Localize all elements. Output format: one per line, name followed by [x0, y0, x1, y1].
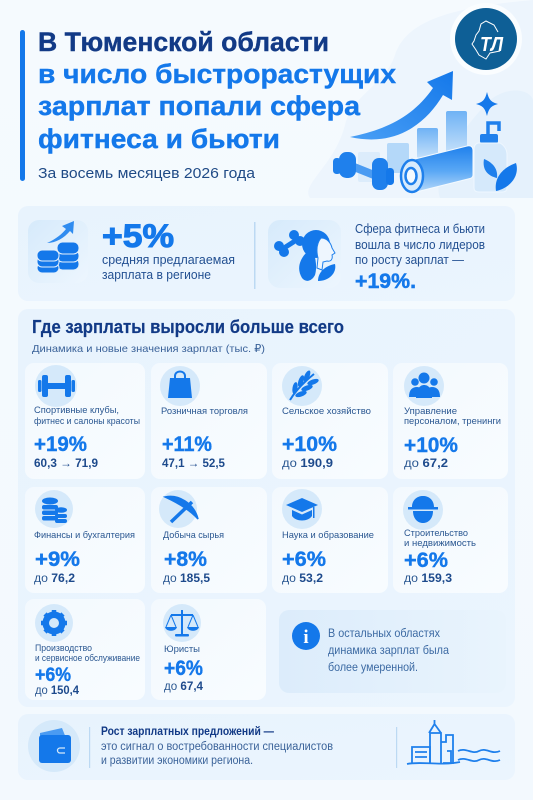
icon: info [292, 622, 320, 650]
icon: shopping bag [168, 372, 192, 398]
icon: bottle with leaves [474, 123, 517, 192]
card: science and education [272, 487, 388, 593]
card: retail: +11% [162, 433, 212, 456]
card: HR and training: Управление [404, 406, 457, 417]
subheading: Динамика и новые значения зарплат (тыс. ₽) [32, 343, 265, 355]
title: в число быстрорастущих [38, 59, 396, 89]
title accent bar [20, 30, 25, 181]
icon: fitness roller [401, 146, 473, 192]
card: construction: Строительство [404, 528, 468, 539]
stat: +5%: зарплата в регионе [102, 268, 211, 282]
card: retail [151, 363, 267, 479]
card: agriculture: до 190,9 [282, 456, 333, 470]
card: sports clubs: +19% [34, 433, 87, 456]
icon: wallet [28, 720, 80, 772]
logo region outline [472, 21, 500, 59]
icon: city by the river [407, 720, 500, 764]
card: lawyers: до 67,4 [164, 679, 203, 693]
card: construction: до 159,3 [404, 571, 452, 585]
card: mining: +8% [164, 548, 207, 571]
card: construction [393, 487, 508, 593]
fitness leaders text: Сфера фитнеса и бьюти [355, 222, 485, 236]
fitness leaders text: +19%. [355, 270, 416, 293]
card: finance: Финансы и бухгалтерия [34, 530, 135, 541]
callout: other sectors: более умеренной. [328, 660, 418, 674]
card: manufacturing and service [25, 599, 145, 700]
icon: info: i [303, 627, 309, 648]
heading: Где зарплаты выросли больше всего [32, 317, 344, 337]
icon: sparkle [476, 92, 498, 116]
card: HR and training: +10% [404, 434, 458, 457]
card: manufacturing and service: и сервисное обслуживание [35, 653, 140, 664]
callout: other sectors: В остальных областях [328, 626, 440, 640]
conclusion text [101, 726, 333, 767]
card: science and education: до 53,2 [282, 571, 323, 585]
card: sports clubs: 60,3 → 71,9 [34, 456, 98, 470]
header illustration [308, 0, 533, 198]
card: science and education: Наука и образование [282, 530, 374, 541]
icon: dumbbell [333, 152, 394, 190]
icon: hard hat [408, 496, 438, 523]
logo letters: ТЛ [480, 34, 504, 56]
title: фитнеса и бьюти [38, 124, 280, 154]
fitness leaders text: по росту зарплат — [355, 253, 464, 267]
card: finance: +9% [35, 548, 80, 571]
icon tile: coins with arrow [28, 220, 88, 283]
panel: salary growth by sector [18, 309, 515, 707]
card: mining: Добыча сырья [163, 530, 224, 541]
icon: people [409, 372, 440, 398]
card: construction: +6% [404, 549, 448, 572]
icon: pickaxe [165, 496, 198, 522]
growth arrow [350, 71, 453, 139]
card: retail: Розничная торговля [161, 406, 248, 417]
card: HR and training [393, 363, 508, 479]
illustration backdrop [308, 0, 533, 198]
card: finance: до 76,2 [34, 571, 75, 585]
card: science and education: +6% [282, 548, 326, 571]
icon tile: woman with dumbbell [268, 220, 341, 288]
panel: conclusion [18, 714, 515, 780]
icon: scales [165, 610, 199, 636]
icon: gear [41, 610, 67, 636]
callout: other sectors [279, 610, 506, 693]
card: manufacturing and service: до 150,4 [35, 683, 79, 697]
title: зарплат попали сфера [38, 91, 361, 121]
callout: other sectors: динамика зарплат была [328, 643, 449, 657]
panel: key figures [18, 206, 515, 301]
title [38, 27, 396, 154]
card: sports clubs [25, 363, 145, 479]
bar chart [358, 111, 467, 182]
icon: graduation cap [286, 498, 318, 520]
conclusion text: и развитии экономики региона. [101, 755, 253, 767]
stat: +5%: +5% [102, 218, 174, 254]
card: agriculture [272, 363, 388, 479]
stat: +5%: средняя предлагаемая [102, 253, 235, 267]
subtitle: За восемь месяцев 2026 года [38, 166, 256, 182]
icon: wheat [290, 370, 319, 400]
conclusion text: Рост зарплатных предложений — [101, 726, 274, 738]
stat: +5% [102, 218, 235, 282]
card: lawyers: Юристы [164, 644, 200, 655]
card: retail: 47,1 → 52,5 [162, 456, 225, 470]
card: construction: и недвижимость [404, 538, 476, 549]
card: mining: до 185,5 [163, 571, 210, 585]
card: manufacturing and service: +6% [35, 665, 71, 686]
card: sports clubs: Спортивные клубы, [34, 405, 119, 416]
card: mining [151, 487, 267, 593]
icon: coins [42, 498, 67, 523]
card: HR and training: персоналом, тренинги [404, 416, 501, 427]
card: finance [25, 487, 145, 593]
card: agriculture: Сельское хозяйство [282, 406, 371, 417]
card: HR and training: до 67,2 [404, 456, 448, 470]
fitness leaders text [355, 222, 485, 293]
fitness leaders text: вошла в число лидеров [355, 238, 485, 252]
conclusion text: это сигнал о востребованности специалистов [101, 741, 333, 753]
title: В Тюменской области [38, 27, 329, 57]
card: lawyers [151, 599, 266, 700]
card: manufacturing and service: Производство [35, 643, 92, 654]
card: lawyers: +6% [164, 657, 203, 680]
card: sports clubs: фитнес и салоны красоты [34, 416, 140, 427]
logo [450, 3, 522, 75]
card: agriculture: +10% [282, 433, 337, 456]
icon: dumbbell [38, 375, 75, 397]
